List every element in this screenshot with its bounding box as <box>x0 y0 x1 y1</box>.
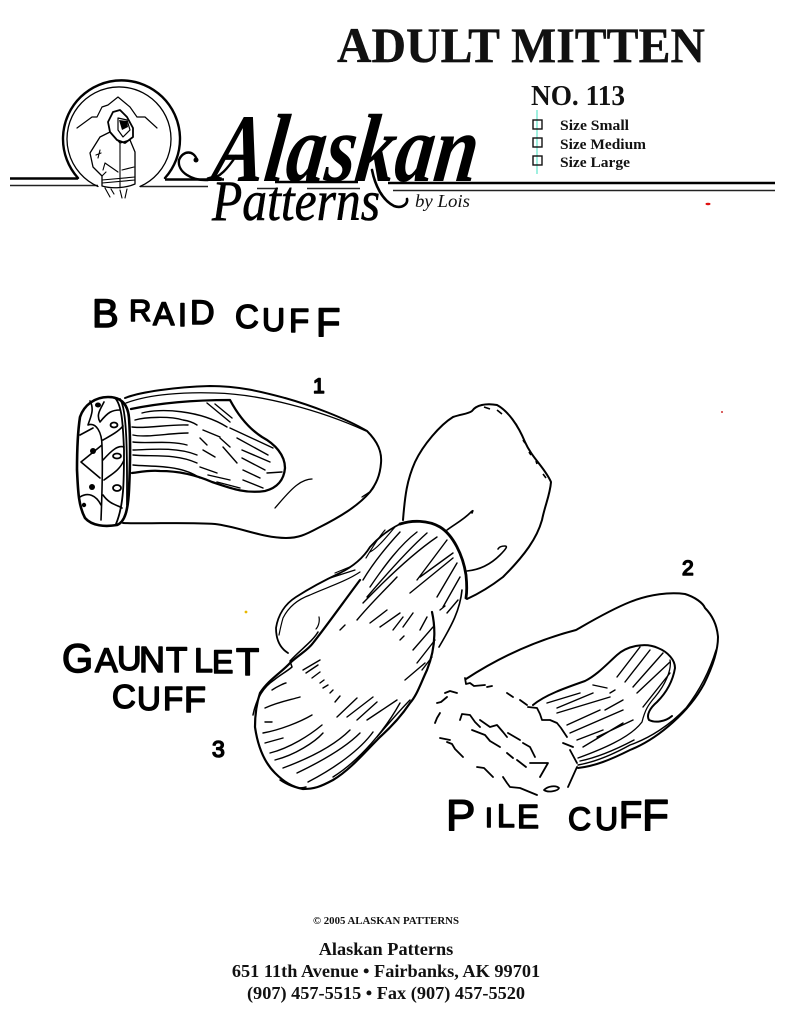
mitten 3 thumb <box>276 524 400 653</box>
size checklist: Size Small <box>560 118 629 134</box>
parka body <box>90 132 135 188</box>
heading: gauntlet cuff second line: C <box>112 678 136 715</box>
size checklist: Size Medium <box>560 137 647 153</box>
mitten 2 outline <box>466 593 718 768</box>
heading: pile cuff: U <box>595 801 618 837</box>
mitten 1 braid cuff <box>77 397 130 526</box>
heading: braid cuff: A <box>153 296 175 332</box>
heading: braid cuff: C <box>235 298 259 335</box>
heading: braid cuff: D <box>190 294 215 332</box>
heading: pile cuff: P <box>446 791 475 840</box>
number 1: 1 <box>313 375 325 398</box>
heading: gauntlet cuff: E <box>212 644 233 680</box>
heading: pile cuff: F <box>619 795 642 837</box>
contact details <box>232 939 540 1004</box>
mitten 3: gauntlet cuff <box>253 404 551 789</box>
mountains <box>77 97 157 128</box>
heading: gauntlet cuff: N <box>139 639 165 680</box>
mitten 1 hatching <box>132 403 282 488</box>
logo rules <box>10 178 775 190</box>
heading: gauntlet cuff: G <box>62 637 93 681</box>
mitten 3 hatching <box>340 532 460 670</box>
copyright: © 2005 ALASKAN PATTERNS <box>313 915 459 927</box>
logo emblem: parka figure in arch <box>63 80 180 198</box>
heading: braid cuff: B <box>92 292 119 336</box>
mitten 3 inner details <box>447 511 506 571</box>
heading: gauntlet cuff second line: F <box>163 680 183 717</box>
size checklist <box>533 110 647 174</box>
number 3: 3 <box>212 736 225 762</box>
pattern number: NO. 113 <box>531 81 625 112</box>
heading: gauntlet cuff: T <box>166 641 187 680</box>
heading: pile cuff: C <box>568 801 591 837</box>
heading: pile cuff: F <box>642 791 669 840</box>
heading: gauntlet cuff: T <box>236 642 259 684</box>
heading: braid cuff: F <box>289 302 309 339</box>
heading: pile cuff: L <box>497 798 515 834</box>
mitten 2: pile cuff <box>435 593 718 795</box>
mitten 3 gauntlet edge <box>400 521 467 598</box>
heading: pile cuff: E <box>517 798 539 835</box>
mitten 2 hatching <box>547 647 670 747</box>
number 2: 2 <box>682 557 694 580</box>
logo wordmark: Patterns: Patterns <box>211 170 380 233</box>
size checklist: Size Large <box>560 155 630 171</box>
heading: gauntlet cuff: L <box>194 642 213 680</box>
contact details: Alaskan Patterns <box>319 939 453 959</box>
heading: gauntlet cuff second line: F <box>184 679 206 720</box>
stray red mark right <box>721 411 723 413</box>
mitten 3 body <box>255 580 434 789</box>
logo wordmark: Alaskan: Alaskan <box>202 95 486 203</box>
mitten 3 back palm <box>403 404 551 599</box>
mitten 1 outline <box>123 386 381 538</box>
mitten 1: braid cuff <box>77 386 381 538</box>
title: ADULT MITTEN <box>337 17 705 73</box>
contact details: (907) 457-5515 • Fax (907) 457-5520 <box>247 983 525 1004</box>
logo byline: by Lois <box>415 191 470 211</box>
mitten 2 thumb <box>533 645 675 722</box>
heading: braid cuff: I <box>178 297 187 333</box>
heading: braid cuff: U <box>262 302 285 338</box>
heading: braid cuff: R <box>129 293 151 328</box>
mitten 1 thumb <box>131 400 285 492</box>
heading: pile cuff: I <box>485 802 493 833</box>
logo swash <box>179 152 407 207</box>
contact details: 651 11th Avenue • Fairbanks, AK 99701 <box>232 961 540 981</box>
stray yellow mark <box>245 611 247 613</box>
stray red mark <box>706 203 710 205</box>
mitten 2 pile cuff <box>435 678 577 795</box>
heading: braid cuff: F <box>316 301 340 345</box>
heading: gauntlet cuff: U <box>117 640 142 678</box>
heading: gauntlet cuff second line: U <box>137 680 161 717</box>
heading: gauntlet cuff: A <box>95 642 118 680</box>
fur hood <box>108 110 133 143</box>
